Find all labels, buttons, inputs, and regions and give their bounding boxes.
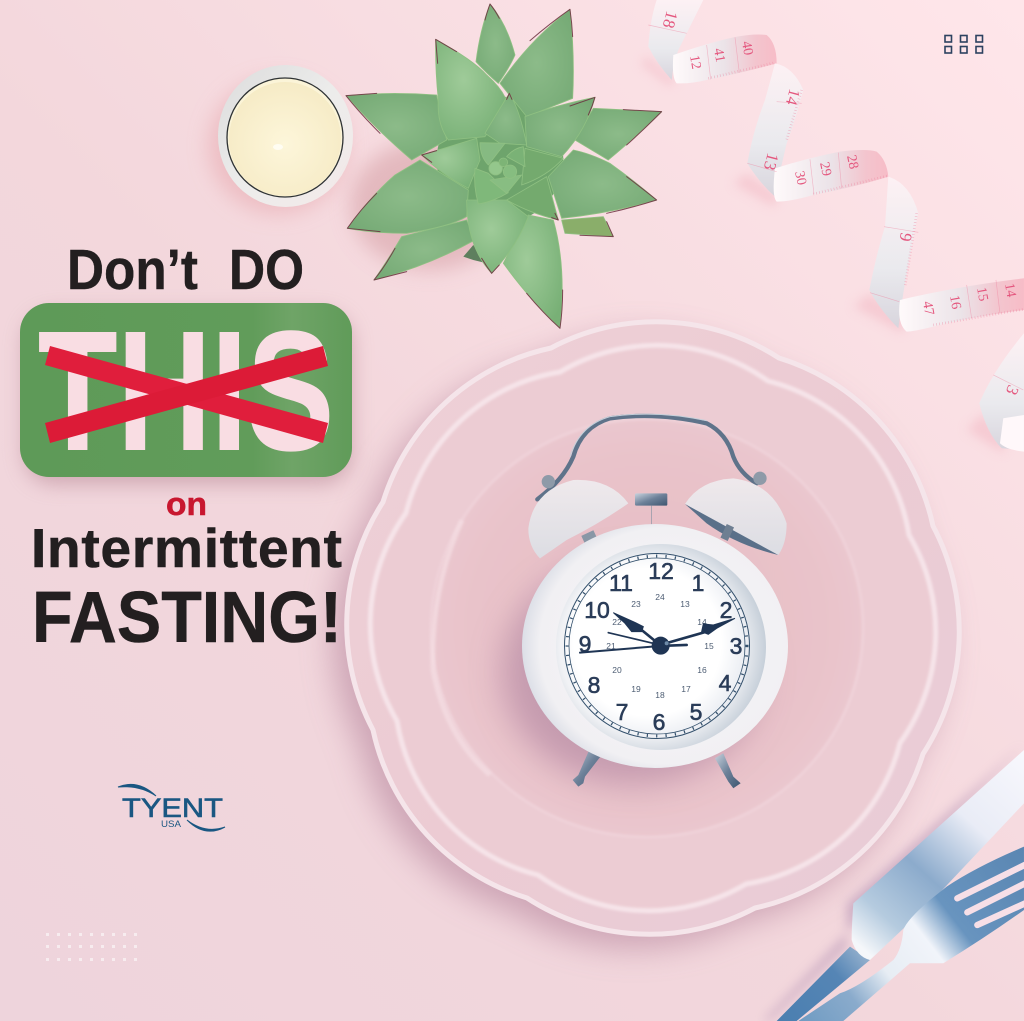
clock face: 22 (612, 617, 622, 627)
fork (798, 847, 1024, 1021)
clock face: 23 (631, 599, 641, 609)
dot pattern (46, 933, 137, 961)
clock face: 9 (579, 631, 591, 657)
clock face: 24 (655, 592, 665, 602)
clock face: 19 (631, 684, 641, 694)
measuring tape: 16 (946, 294, 963, 310)
red cross (45, 346, 328, 443)
candle (208, 65, 353, 214)
measuring tape: 13 (760, 151, 782, 172)
alarm switch (635, 493, 667, 506)
tape tick marks (708, 63, 1023, 325)
measuring tape: 15 (973, 286, 990, 302)
logo: Tyent USA: USA (161, 819, 181, 829)
word: Intermittent: Intermittent (31, 517, 342, 579)
clock face: 21 (606, 641, 616, 651)
clock face: 5 (690, 699, 702, 725)
clock face (564, 553, 750, 739)
clock face: 11 (609, 570, 633, 596)
clock feet (573, 748, 741, 788)
measuring tape: 14 (782, 87, 803, 107)
word: FASTING!: FASTING! (32, 578, 342, 658)
left bell (528, 475, 628, 558)
right bell (685, 472, 787, 555)
measuring tape: 28 (843, 154, 861, 171)
measuring tape: 40 (738, 40, 755, 56)
clock face: 20 (612, 665, 622, 675)
clock face: 16 (697, 665, 707, 675)
measuring tape: 41 (710, 47, 727, 63)
alarm clock (502, 414, 788, 788)
heading: Don't DO: DO (229, 238, 304, 302)
measuring tape: 47 (919, 300, 936, 316)
measuring tape: 12 (686, 54, 703, 70)
clock face: 10 (584, 597, 610, 623)
clock body (522, 524, 788, 768)
word: THIS: THIS (38, 296, 334, 486)
icon: menu grid (945, 36, 982, 53)
measuring tape: 9 (896, 231, 916, 243)
clock handle (537, 416, 757, 499)
clock face: 2 (720, 597, 732, 623)
clock face: 8 (588, 672, 600, 698)
clock face: 18 (655, 690, 665, 700)
clock face: 12 (648, 558, 674, 584)
knife (763, 745, 1024, 1021)
clock face: 14 (697, 617, 707, 627)
measuring tape: 18 (659, 9, 681, 30)
clock face: 7 (616, 699, 628, 725)
fork tine gaps (957, 864, 1024, 925)
logo: Tyent USA (118, 784, 225, 831)
clock face: 6 (653, 709, 665, 735)
clock face: 17 (681, 684, 691, 694)
measuring tape: 30 (791, 170, 809, 187)
green THIS badge (20, 296, 352, 486)
clock face: 13 (680, 599, 690, 609)
measuring tape: 29 (816, 161, 834, 178)
clock face: 4 (719, 670, 732, 696)
clock face: 15 (704, 641, 714, 651)
logo: Tyent USA: TYENT (122, 793, 223, 823)
purple leaf tips (346, 4, 662, 328)
measuring tape: 3 (1002, 382, 1023, 398)
plate (333, 322, 959, 948)
measuring tape: 14 (1001, 282, 1018, 298)
succulent plant (346, 4, 662, 328)
heading: Don't DO: Don’t (67, 238, 198, 302)
word: on: on (166, 486, 207, 522)
clock face: 3 (730, 633, 742, 659)
clock face: 1 (692, 570, 704, 596)
measuring tape (640, 0, 1024, 453)
heading: Don't DO (67, 238, 304, 302)
